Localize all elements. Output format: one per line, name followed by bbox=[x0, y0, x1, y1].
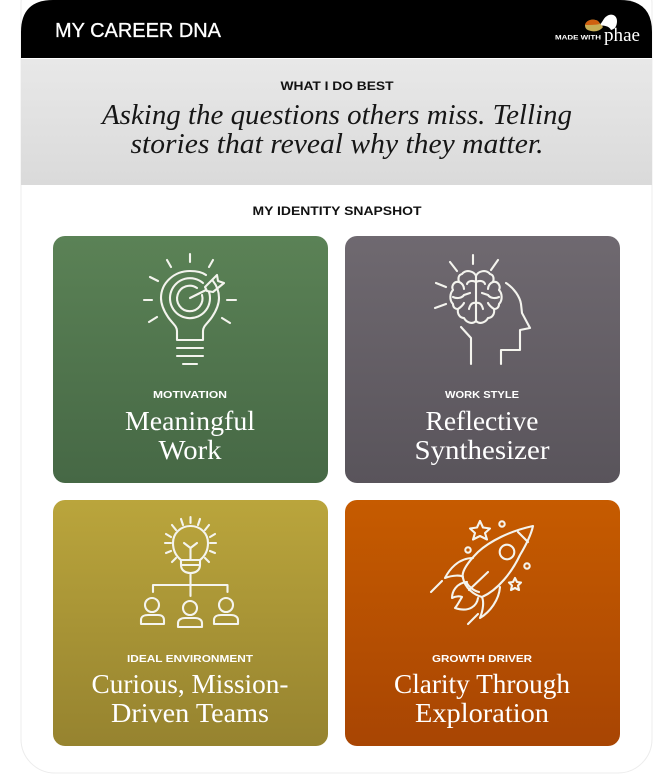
panel: motivation bbox=[53, 236, 328, 483]
icon: rocket bbox=[431, 521, 533, 624]
label: motivation: MOTIVATION bbox=[153, 389, 227, 401]
value: clarity through exploration: Exploration bbox=[415, 698, 550, 728]
value: curious, mission-driven teams: Driven Teams bbox=[111, 698, 269, 728]
label: growth driver: GROWTH DRIVER bbox=[432, 653, 532, 665]
icon: bulb and team hierarchy bbox=[141, 517, 238, 627]
panel: work style bbox=[345, 236, 620, 483]
logo: made with phae: MADE WITH bbox=[555, 34, 601, 42]
logo: made with phae: phae bbox=[604, 25, 640, 46]
header bar bbox=[21, 0, 652, 58]
label: work style: WORK STYLE bbox=[445, 389, 519, 401]
value: meaningful work: Work bbox=[158, 435, 222, 465]
label: ideal environment: IDEAL ENVIRONMENT bbox=[127, 653, 254, 665]
logo: made with phae bbox=[555, 15, 640, 46]
value: reflective synthesizer: Reflective bbox=[426, 406, 539, 436]
heading: what I do best: WHAT I DO BEST bbox=[280, 79, 394, 93]
value: clarity through exploration: Clarity Through bbox=[394, 669, 571, 699]
statement: stories that reveal why they matter. bbox=[130, 129, 544, 160]
value: curious, mission-driven teams: Curious, Mission- bbox=[92, 669, 289, 699]
panel: growth driver bbox=[345, 500, 620, 746]
heading: my identity snapshot: MY IDENTITY SNAPSHOT bbox=[252, 204, 422, 218]
panel: ideal environment bbox=[53, 500, 328, 746]
value: reflective synthesizer: Synthesizer bbox=[414, 435, 550, 465]
header title: MY CAREER DNA bbox=[55, 20, 222, 42]
icon: light bulb with target bbox=[144, 254, 236, 364]
panel: what I do best bbox=[21, 59, 652, 185]
icon: head with brain bbox=[435, 255, 530, 364]
value: meaningful work: Meaningful bbox=[125, 406, 255, 436]
statement: Asking the questions others miss. Telling bbox=[100, 100, 572, 131]
